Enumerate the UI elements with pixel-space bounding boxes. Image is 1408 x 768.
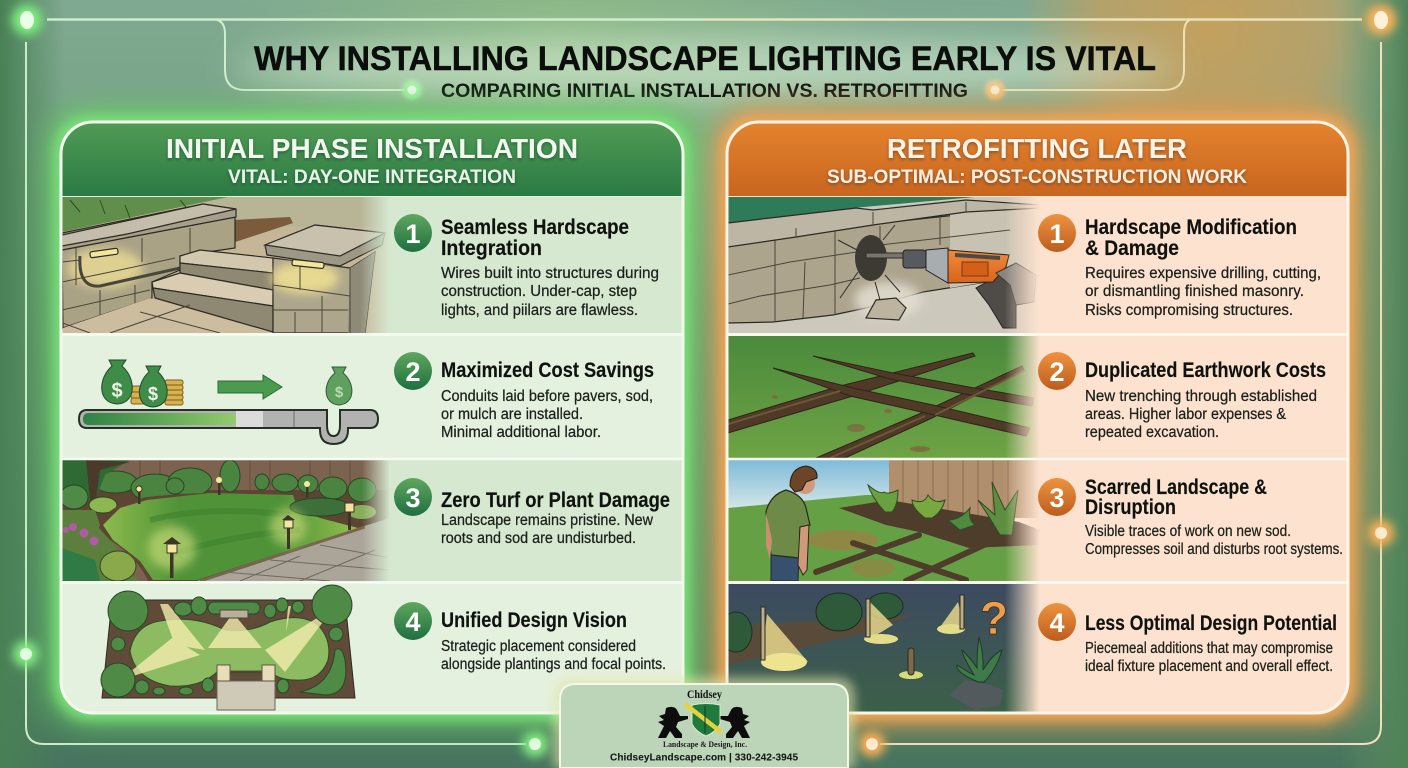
row 1 text: Hardscape Modification — [1085, 216, 1297, 239]
mulch edge and lawn — [99, 492, 280, 581]
illustration: cost savings bags and conduit bar: $ — [111, 380, 123, 402]
steps — [180, 250, 273, 273]
illustration: pristine lawn with path lights — [60, 460, 390, 581]
contact line: ChidseyLandscape.com | 330-242-3945 — [610, 752, 798, 764]
arrow — [218, 375, 282, 399]
row 2 text: repeated excavation. — [1085, 424, 1219, 441]
row 4 text: Piecemeal additions that may compromise — [1085, 640, 1333, 657]
row 1 number badge — [394, 214, 432, 252]
row 2 text — [441, 359, 654, 441]
path lights — [136, 477, 354, 578]
row 2 text: Minimal additional labor. — [441, 424, 601, 441]
illustration: duplicated trenches — [728, 336, 1040, 458]
pavers — [63, 298, 152, 329]
row 3 number badge — [1038, 478, 1076, 516]
illustration: cost savings bags and conduit bar — [79, 360, 378, 444]
row 1 text: Wires built into structures during — [441, 265, 659, 282]
drill — [866, 248, 1036, 328]
panel header — [60, 120, 684, 196]
row 4 text: Less Optimal Design Potential — [1085, 612, 1337, 635]
illustration: cost savings bags and conduit bar: $ — [148, 384, 158, 404]
row 4 text: Strategic placement considered — [441, 638, 636, 655]
wall face — [728, 206, 1040, 323]
row 1 text: Requires expensive drilling, cutting, — [1085, 265, 1321, 282]
brand name: Chidsey — [687, 687, 722, 701]
row 1 number badge — [1038, 214, 1076, 252]
row 4 text: alongside plantings and focal points. — [441, 656, 666, 673]
row 3 text: Zero Turf or Plant Damage — [441, 489, 670, 512]
row 2 text: Duplicated Earthwork Costs — [1085, 359, 1326, 382]
panel header: INITIAL PHASE INSTALLATION — [166, 133, 578, 164]
wall face — [62, 217, 235, 328]
row 3 text: roots and sod are undisturbed. — [441, 530, 636, 547]
row 4 text — [441, 609, 666, 673]
row 1 number badge: 1 — [1049, 219, 1065, 249]
icon: crest with lions — [658, 704, 750, 738]
row 4 number badge — [1038, 603, 1076, 641]
row 1 text: Integration — [441, 237, 542, 260]
row 2 text: areas. Higher labor expenses & — [1085, 406, 1287, 423]
panel header: VITAL: DAY-ONE INTEGRATION — [228, 166, 516, 188]
row 1 text: or dismantling finished masonry. — [1085, 283, 1304, 300]
row 3 text: Disruption — [1085, 496, 1176, 519]
row 2 text: or mulch are installed. — [441, 406, 583, 423]
panel header: RETROFITTING LATER — [887, 133, 1187, 164]
row 4 text — [1085, 612, 1337, 675]
row 2 text: Maximized Cost Savings — [441, 359, 654, 382]
row 4 number badge: 4 — [405, 607, 421, 637]
illustration: cost savings bags and conduit bar: $ — [335, 384, 344, 401]
row 2 number badge: 2 — [1049, 357, 1065, 387]
coins — [131, 380, 183, 405]
row 1 text: lights, and piilars are flawless. — [441, 302, 638, 319]
row 2 number badge: 2 — [405, 357, 421, 387]
row 4 number badge — [394, 602, 432, 640]
row 3 number badge — [394, 478, 432, 516]
panel: retrofitting later — [712, 107, 1363, 727]
wall cap — [728, 200, 1040, 247]
subtitle: COMPARING INITIAL INSTALLATION VS. RETROFITTING — [441, 80, 968, 102]
row 4 text: ideal fixture placement and overall effect. — [1085, 658, 1333, 675]
row 1 text — [441, 216, 659, 319]
row 2 text: New trenching through established — [1085, 388, 1317, 405]
row 2 number badge — [1038, 352, 1076, 390]
illustration: piecemeal lights at night — [720, 584, 1040, 714]
illustration: drill damaging wall — [728, 197, 1040, 333]
row 2 text — [1085, 359, 1326, 441]
shrubs — [93, 460, 376, 502]
row 1 text — [1085, 216, 1321, 319]
row 2 text: Conduits laid before pavers, sod, — [441, 388, 653, 405]
illustration: stone wall with under-cap lights — [60, 197, 390, 333]
panel header: SUB-OPTIMAL: POST-CONSTRUCTION WORK — [827, 166, 1247, 188]
title block — [234, 38, 1174, 102]
main title: WHY INSTALLING LANDSCAPE LIGHTING EARLY IS VITAL — [254, 40, 1156, 78]
row 2 number badge — [394, 352, 432, 390]
pillar — [273, 252, 375, 333]
logo card — [553, 677, 855, 768]
row 3 text: Visible traces of work on new sod. — [1085, 523, 1291, 540]
row 3 text: Scarred Landscape & — [1085, 476, 1267, 499]
panel: initial phase installation — [46, 107, 698, 727]
row dividers — [62, 334, 1347, 582]
illustration: piecemeal lights at night: ? — [980, 592, 1008, 644]
row 1 text: & Damage — [1085, 237, 1179, 260]
paving — [197, 518, 390, 581]
illustration: unified design plan view — [101, 585, 355, 710]
damage — [854, 282, 922, 318]
row 3 text — [1085, 476, 1343, 558]
panel header — [726, 120, 1350, 196]
row 1 number badge: 1 — [405, 219, 421, 249]
row 4 number badge: 4 — [1049, 608, 1065, 638]
row 3 text — [441, 489, 670, 547]
row 1 text: Risks compromising structures. — [1085, 302, 1293, 319]
illustration: man looking at scarred landscape — [728, 460, 1040, 581]
row 3 number badge: 3 — [405, 483, 421, 513]
man — [766, 466, 817, 581]
row 1 text: construction. Under-cap, step — [441, 283, 637, 300]
row 1 text: Seamless Hardscape — [441, 216, 629, 239]
row 4 text: Unified Design Vision — [441, 609, 627, 632]
row 3 text: Compresses soil and disturbs root systems. — [1085, 541, 1343, 558]
company line: Landscape & Design, Inc. — [663, 740, 747, 749]
progress bar with conduit dip — [79, 410, 378, 444]
row 3 text: Landscape remains pristine. New — [441, 512, 654, 529]
row 3 number badge: 3 — [1049, 483, 1065, 513]
